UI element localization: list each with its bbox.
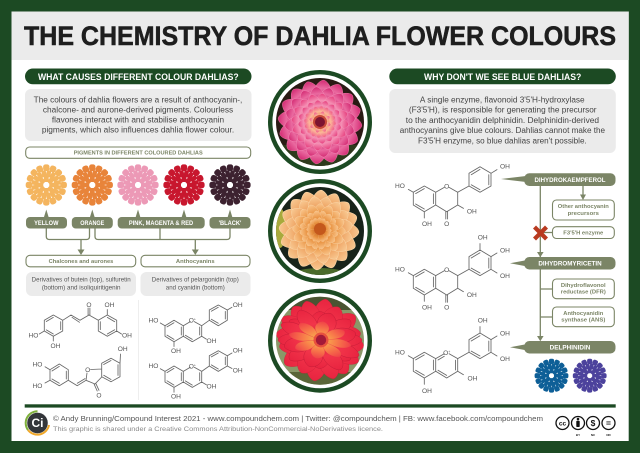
structure: dihydrokaempferol: HO [395,183,405,190]
right intro text: A single enzyme, flavonoid 3'5'H-hydroxylase [420,96,585,105]
panel: why don't we see blue dahlias [389,68,621,407]
icon: pink dahlia [100,147,176,223]
pill: dihydromyricetin: DIHYDROMYRICETIN [538,261,602,267]
left heading [25,68,252,84]
structure: butein: O [86,302,92,309]
box: dihydroflavonol reductase: Dihydroflavonol [561,283,606,289]
structure: dihydromyricetin: OH [422,304,432,312]
structure: delphinidin: OH [422,388,432,395]
structure: dihydromyricetin: OH [500,247,510,254]
anthocyanins box [141,255,250,267]
right intro text [389,89,616,153]
structure: butein [29,302,132,350]
structure: butein: OH [122,333,132,340]
pill: delphinidin [510,341,616,354]
pill: delphinidin: DELPHINIDIN [550,345,590,351]
structure: delphinidin: OH [467,375,478,382]
structure: pelargonidin: OH [233,302,243,309]
credit line: © Andy Brunning/Compound Interest 2021 - www.compoundchem.com | Twitter: @compoundchem | FB: www.facebook.com/compoundchem [53,415,543,423]
creative commons icons: $ [591,418,596,428]
footer [25,404,616,437]
box: F3'5'H enzyme [552,227,614,238]
icon: blue dahlia [520,344,583,407]
photo: orange dahlia [268,179,372,283]
structure: dihydromyricetin [395,235,510,312]
structure: dihydromyricetin: OH [478,235,488,242]
icon: black dahlia [192,147,268,223]
icon: yellow dahlia [8,147,84,223]
structure: delphinidin: OH [478,318,488,325]
structure: dihydromyricetin: O [444,304,449,312]
structure: dihydromyricetin: HO [395,266,405,273]
structure: butein: OH [105,302,115,309]
box: other anthocyanin precursors: precursors [568,211,599,217]
panel: what causes different colour dahlias [8,68,268,401]
left heading: WHAT CAUSES DIFFERENT COLOUR DAHLIAS? [38,72,239,82]
structure: delphinidin: + [448,350,450,354]
structure: butein: HO [29,333,38,340]
structure: dihydromyricetin: O [444,267,449,274]
icon: orange dahlia [54,147,130,223]
colour labels: YELLOW [34,221,59,227]
structure: cyanidin: O [189,363,194,370]
structure: sulfuretin [33,346,128,399]
box: anthocyanidin synthase: synthase (ANS) [561,317,605,323]
structure: delphinidin: HO [395,349,405,356]
structure: dihydromyricetin: OH [500,273,510,280]
panel: flower photographs [268,70,372,393]
structure: delphinidin: OH [500,356,510,363]
box: dihydroflavonol reductase: reductase (DFR) [561,290,606,296]
structure: cyanidin [149,347,243,401]
chalcones description: (bottom) and isoliquiritigenin [42,286,121,292]
connector arrows [46,228,230,255]
box: other anthocyanin precursors: Other anthocyanin [558,204,609,210]
structure: dihydrokaempferol [395,164,510,228]
anthocyanins box: Anthocyanins [176,259,215,265]
structure: cyanidin: OH [171,394,181,401]
box: F3'5'H enzyme: F3'5'H enzyme [563,230,604,236]
structure: dihydrokaempferol: O [444,184,449,191]
structure: dihydrokaempferol: OH [422,221,432,228]
chalcones description: Derivatives of butein (top), sulfuretin [32,277,131,283]
left intro text: pigments, which also influences dahlia flower colour. [42,126,234,135]
structure: cyanidin: OH [233,347,243,354]
creative commons icons: = [606,418,611,428]
anthocyanins description: and cyanidin (bottom) [166,286,225,292]
chalcones and aurones box [26,255,136,267]
structure: pelargonidin: HO [149,317,158,324]
box: anthocyanidin synthase [552,307,614,327]
pill: dihydromyricetin [510,257,616,270]
left intro text: flavones interact with and stabilise anthocyanin [52,116,224,125]
structure: dihydrokaempferol: OH [500,164,510,171]
anthocyanins description [140,272,250,296]
structure: pelargonidin [149,302,243,355]
icon: red cross [533,226,548,240]
box: other anthocyanin precursors [552,200,614,220]
title band [12,12,629,60]
icon: violet dahlia [558,344,621,407]
pill: dihydrokaempferol: DIHYDROKAEMPFEROL [534,178,606,184]
anthocyanins description: Derivatives of pelargonidin (top) [152,277,239,283]
creative commons icons: ND [606,433,611,437]
colour labels: ORANGE [80,221,104,227]
creative commons icons: NC [591,433,596,437]
left intro text [25,89,252,141]
structure: dihydromyricetin: OH [467,292,477,299]
structure: butein: OH [51,343,61,350]
right heading [389,68,616,84]
structure: delphinidin: OH [500,330,510,337]
chalcones description [26,272,136,296]
right intro text: (F3'5'H), is responsible for generating the precursor [409,106,597,115]
photo: pink dahlia [268,70,372,174]
box: dihydroflavonol reductase [552,279,614,299]
structure: sulfuretin: OH [118,346,128,353]
box: anthocyanidin synthase: Anthocyanidin [563,311,604,317]
right intro text: to the anthocyanidin delphinidin. Delphinidin-derived [406,116,599,125]
colour labels: PINK, MAGENTA & RED [129,221,194,227]
creative commons icons: BY [576,433,580,437]
icon: red dahlia [146,147,222,223]
photo: red dahlia [268,288,372,393]
structure: delphinidin [395,318,510,395]
structure: delphinidin: O [443,350,448,357]
structure: pelargonidin: + [194,318,196,322]
left intro text: chalcone- and aurone-derived pigments. Colourless [43,106,233,115]
right intro text: F3'5'H enzyme, so blue dahlias aren't possible. [418,136,587,145]
pill: dihydrokaempferol [501,173,616,186]
logo: Ci [32,416,44,430]
structure: pelargonidin: OH [171,348,181,355]
structure: sulfuretin: HO [33,361,42,368]
structure: cyanidin: OH [207,384,217,391]
left intro text: The colours of dahlia flowers are a result of anthocyanin-, [34,96,242,105]
licence line: This graphic is shared under a Creative Commons Attribution-NonCommercial-NoDerivatives licence. [53,426,383,433]
structure: pelargonidin: O [189,318,194,325]
creative commons icons [556,416,615,437]
structure: sulfuretin: O [85,367,90,374]
right intro text: anthocyanins give blue colours. Dahlias cannot make the [400,126,606,135]
structure: pelargonidin: OH [207,338,217,345]
structure: dihydrokaempferol: OH [467,208,477,216]
structure: sulfuretin: HO [33,383,42,390]
pigments subheading [26,147,251,158]
structure: cyanidin: + [194,363,196,367]
structure: cyanidin: HO [149,363,158,370]
right heading: WHY DON'T WE SEE BLUE DAHLIAS? [424,72,581,82]
structure: cyanidin: OH [233,368,243,375]
colour labels [26,210,250,228]
structure: sulfuretin: O [96,392,102,399]
colour labels: 'BLACK' [219,221,242,227]
structure: dihydrokaempferol: O [444,221,449,228]
creative commons icons: cc [559,420,566,427]
pigments subheading: PIGMENTS IN DIFFERENT COLOURED DAHLIAS [74,151,203,157]
chalcones and aurones box: Chalcones and aurones [49,259,113,265]
logo [26,411,49,435]
pathway flow lines [537,186,586,341]
